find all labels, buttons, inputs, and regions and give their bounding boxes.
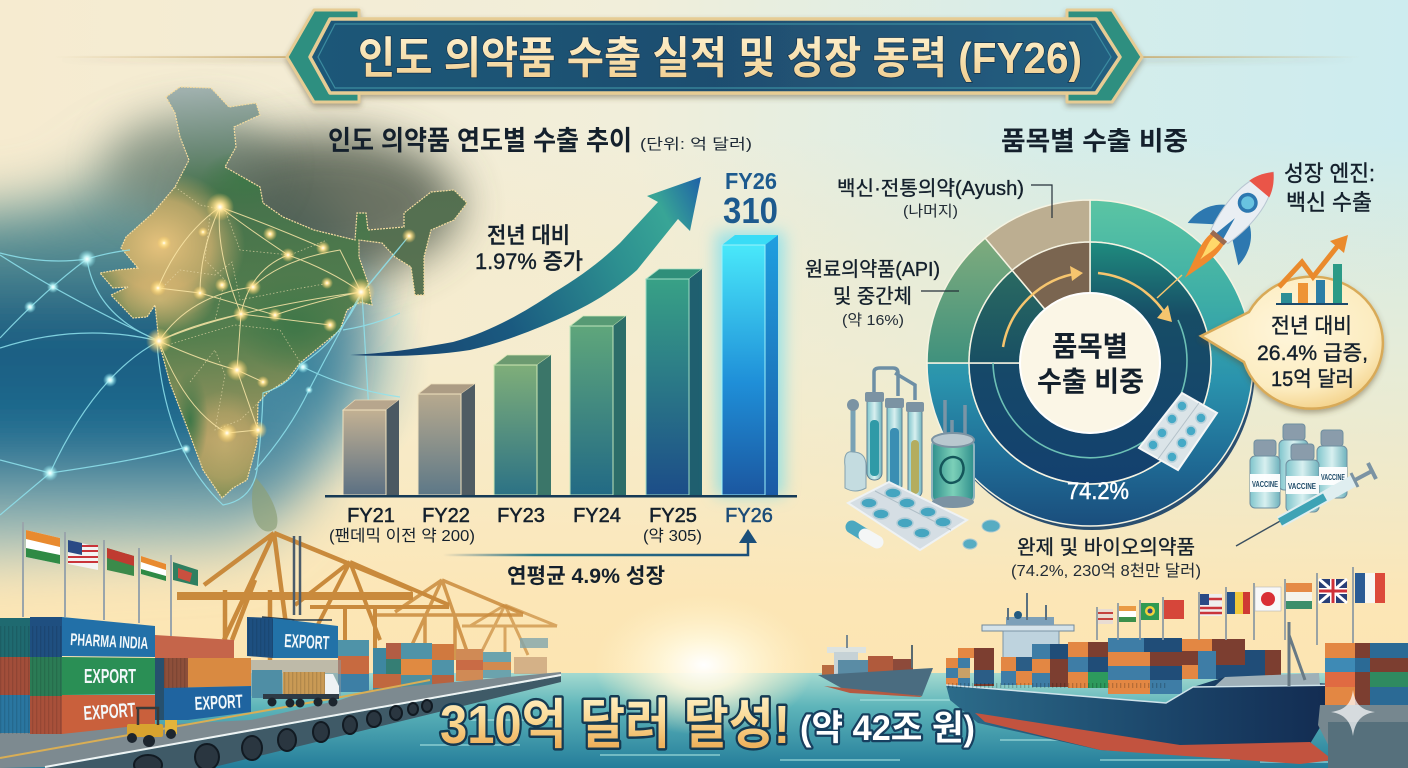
callout: year over year: 전년 대비: [487, 223, 570, 248]
background container stacks: [251, 638, 548, 698]
callout: CAGR text: 연평균 4.9% 성장: [507, 565, 665, 588]
donut chart: [927, 200, 1255, 530]
callout: vaccine growth bubble: [1201, 235, 1383, 409]
icon: Sri Lanka: [252, 478, 277, 531]
headline: achievement: 310억 달러 달성!: [440, 695, 790, 755]
hanging container: EXPORT: [284, 631, 330, 654]
flags right: [1097, 567, 1385, 645]
bar: FY26 highlighted: [716, 232, 784, 496]
callout text: 15억 달러: [1271, 368, 1354, 391]
bar: FY25: [646, 269, 702, 495]
panel: yearly export bar chart: [325, 126, 797, 588]
label: center: [1037, 331, 1144, 397]
label: 74.2% value: 74.2%: [1067, 478, 1129, 505]
title banner: [55, 10, 1360, 102]
label: vaccine and Ayush: [837, 177, 1052, 220]
icon: sparkle watermark: [1331, 690, 1375, 736]
label: center: 수출 비중: [1037, 366, 1144, 397]
label: growth engine: 성장 엔진:: [1284, 161, 1375, 186]
label: growth engine: [1284, 161, 1375, 215]
label: API: (약 16%): [842, 312, 904, 329]
callout text: [1257, 315, 1368, 391]
distant ship: [818, 635, 933, 697]
flags left: [23, 522, 198, 636]
bar: FY23: [494, 355, 551, 495]
India landmass: [75, 87, 470, 500]
axis labels: FY26: [725, 505, 773, 527]
icon: pills and capsule: [848, 482, 1000, 550]
map of India with trade network: [0, 87, 470, 531]
container ship: [946, 593, 1346, 764]
value label: FY26 310: [723, 168, 778, 231]
label: center: 품목별: [1052, 331, 1128, 362]
bar: FY24: [570, 316, 626, 495]
container label: PHARMA INDIA: PHARMA INDIA: [70, 630, 149, 653]
cranes: [177, 533, 557, 660]
callout text: 26.4% 급증,: [1257, 342, 1368, 365]
arrow: CAGR: [443, 529, 757, 555]
headline: achievement: (약 42조 원): [800, 709, 975, 748]
container label: EXPORT green: EXPORT: [84, 666, 136, 688]
axis baseline: [325, 495, 797, 498]
bar: FY21: [343, 400, 399, 495]
icon: rocket: [1159, 151, 1299, 299]
label: formulations: 완제 및 바이오의약품: [1017, 536, 1195, 559]
value label: FY26 310: 310: [723, 190, 778, 231]
container label: EXPORT orange: EXPORT: [83, 699, 136, 725]
tire fenders: [134, 700, 432, 768]
axis labels: FY24: [573, 505, 621, 527]
sea: [0, 595, 1408, 768]
label: API: 및 중간체: [833, 285, 912, 308]
label: vaccine and Ayush: (나머지): [903, 203, 958, 220]
quay: [0, 672, 561, 768]
icon: lab equipment: [845, 368, 974, 508]
shipping routes: [0, 236, 409, 515]
icon: vaccine vials and syringe: [1236, 424, 1376, 546]
domestic routes: [158, 207, 361, 433]
heading: chart title: (단위: 억 달러): [640, 136, 752, 153]
axis labels: FY23: [497, 505, 545, 527]
label: formulations: (74.2%, 230억 8천만 달러): [1011, 562, 1201, 580]
panel: harbour and sea: [0, 522, 1408, 768]
icon: growth chart: [1276, 235, 1348, 304]
bar: FY22: [418, 384, 475, 495]
deck containers: [946, 638, 1281, 694]
title text: 인도 의약품 수출 실적 및 성장 동력 (FY26): [358, 34, 1082, 83]
icon: vaccine vials and syringe: VACCINE: [1252, 480, 1278, 489]
ship bridge: [982, 593, 1074, 683]
icon: forklift: [127, 708, 177, 747]
callout: year over year: [475, 223, 583, 274]
containers left stack: [0, 617, 251, 734]
callout text: 전년 대비: [1271, 315, 1352, 338]
label: API: 원료의약품(API): [805, 258, 940, 281]
icon: vaccine vials and syringe: VACCINE: [1288, 482, 1317, 491]
label: growth engine: 백신 수출: [1286, 190, 1372, 215]
label: API: [805, 258, 959, 329]
heading: donut title: 품목별 수출 비중: [1001, 126, 1188, 156]
label: formulations: [1011, 536, 1201, 580]
axis labels: FY25: [649, 505, 697, 527]
container label: EXPORT blue: EXPORT: [194, 691, 243, 715]
background: ocean around map: [0, 115, 460, 570]
axis labels: FY22: [422, 505, 470, 527]
axis labels: FY21: [347, 505, 395, 527]
arrow: growth swoosh: [350, 177, 701, 356]
value label: FY26 310: FY26: [725, 168, 777, 194]
panel: product share donut: [805, 126, 1383, 580]
axis labels: [329, 505, 773, 545]
network nodes: [24, 193, 416, 481]
hull: [946, 622, 1346, 764]
right quay and containers: [1318, 643, 1408, 768]
callout: year over year: 1.97% 증가: [475, 249, 583, 274]
icon: blister pack on donut: [1139, 393, 1217, 470]
axis labels: (약 305): [643, 527, 702, 545]
growth arrows: [1003, 273, 1182, 347]
label: vaccine and Ayush: 백신·전통의약(Ayush): [837, 177, 1024, 200]
heading: chart title: 인도 의약품 연도별 수출 추이: [328, 126, 632, 156]
icon: vaccine vials and syringe: VACCINE: [1321, 473, 1345, 482]
icon: truck: [263, 672, 339, 708]
axis labels: (팬데믹 이전 약 200): [329, 527, 475, 545]
hanging container: [247, 617, 338, 658]
